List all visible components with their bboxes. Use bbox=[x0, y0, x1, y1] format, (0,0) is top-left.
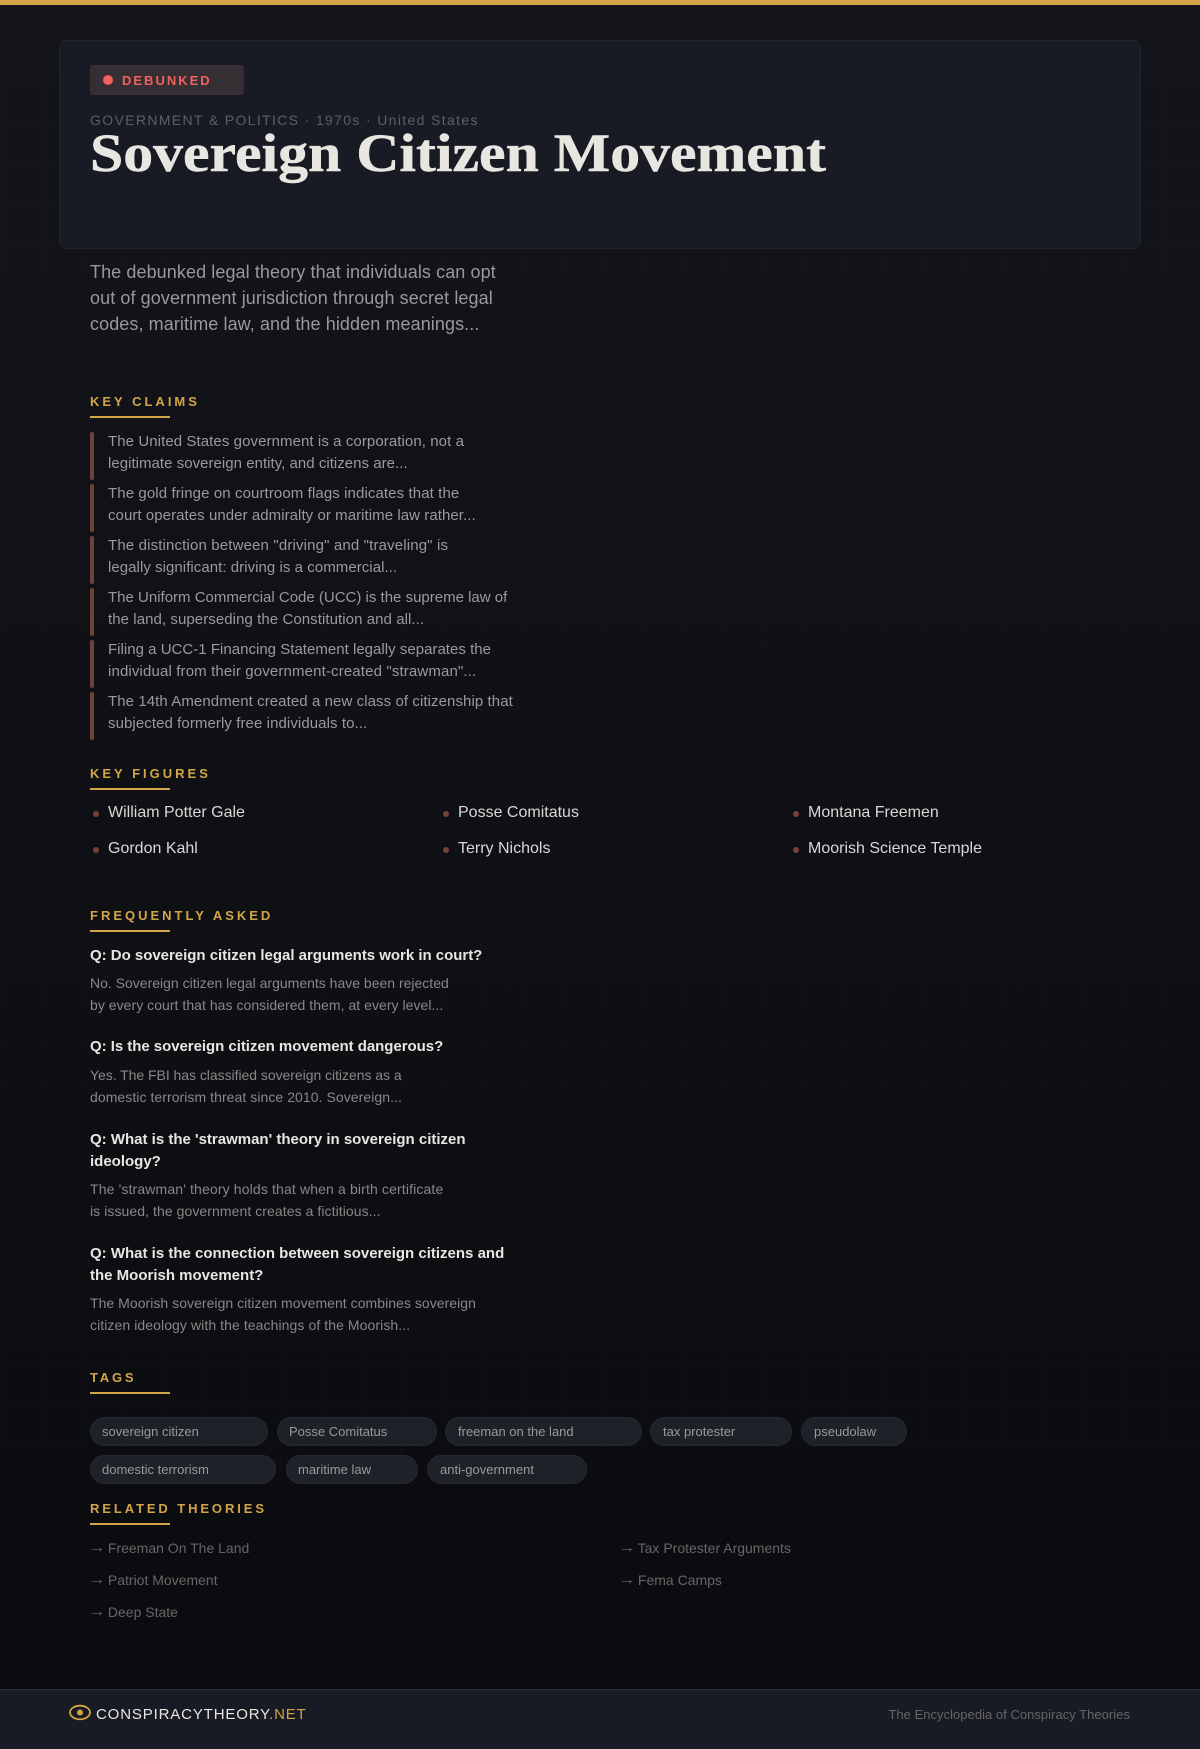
question 1: Q: Do sovereign citizen legal arguments work in court? bbox=[90, 947, 482, 964]
answer 1 bbox=[90, 975, 449, 1013]
question 4 bbox=[90, 1245, 504, 1284]
icon: eye logo bbox=[69, 1704, 91, 1720]
tag: freeman on the land: freeman on the land bbox=[458, 1424, 574, 1439]
answer 1: by every court that has considered them, at every level... bbox=[90, 997, 443, 1013]
claim 6: The 14th Amendment created a new class of citizenship that bbox=[108, 693, 513, 710]
badge label: DEBUNKED bbox=[122, 73, 212, 88]
tag: sovereign citizen: sovereign citizen bbox=[102, 1424, 199, 1439]
tag: tax protester bbox=[650, 1417, 792, 1446]
panel: key claims bbox=[90, 394, 513, 740]
figure: Montana Freemen: Montana Freemen bbox=[808, 804, 939, 821]
tag: anti-government: anti-government bbox=[440, 1462, 534, 1477]
heading: key claims: KEY CLAIMS bbox=[90, 394, 200, 409]
answer 3: is issued, the government creates a fictitious... bbox=[90, 1203, 381, 1219]
question 2: Q: Is the sovereign citizen movement dangerous? bbox=[90, 1038, 443, 1055]
link: Tax Protester Arguments: → bbox=[618, 1539, 636, 1555]
link: Patriot Movement: Patriot Movement bbox=[108, 1572, 218, 1588]
panel: tags bbox=[90, 1370, 907, 1484]
tag: Posse Comitatus: Posse Comitatus bbox=[289, 1424, 387, 1439]
description: out of government jurisdiction through secret legal bbox=[90, 288, 493, 308]
tag: pseudolaw bbox=[801, 1417, 907, 1446]
claim 5: Filing a UCC-1 Financing Statement legally separates the bbox=[108, 641, 491, 658]
question 4: Q: What is the connection between sovereign citizens and bbox=[90, 1245, 504, 1262]
claim 5: individual from their government-created "strawman"... bbox=[108, 663, 476, 680]
claim 3: The distinction between "driving" and "traveling" is bbox=[108, 537, 448, 554]
icon: status dot bbox=[103, 75, 113, 85]
claim 3 bbox=[90, 536, 448, 584]
description: The debunked legal theory that individuals can opt bbox=[90, 262, 496, 282]
description: codes, maritime law, and the hidden meanings... bbox=[90, 314, 479, 334]
figure: Posse Comitatus: Posse Comitatus bbox=[458, 804, 579, 821]
claim 1: The United States government is a corporation, not a bbox=[108, 433, 464, 450]
link: Freeman On The Land: → bbox=[88, 1539, 106, 1555]
status badge: debunked bbox=[90, 65, 244, 95]
link: Tax Protester Arguments: Tax Protester Arguments bbox=[638, 1540, 791, 1556]
brand wordmark: CONSPIRACYTHEORY.NET bbox=[96, 1706, 307, 1723]
claim 4: The Uniform Commercial Code (UCC) is the supreme law of bbox=[108, 589, 507, 606]
claim 4 bbox=[90, 588, 508, 636]
tag: sovereign citizen bbox=[90, 1417, 268, 1446]
claim 3: legally significant: driving is a commercial... bbox=[108, 559, 397, 576]
link: Deep State: → bbox=[88, 1603, 106, 1619]
claim 4: the land, superseding the Constitution and all... bbox=[108, 611, 424, 628]
question 3 bbox=[90, 1131, 466, 1170]
tag: domestic terrorism bbox=[90, 1455, 276, 1484]
claim 1: legitimate sovereign entity, and citizens are... bbox=[108, 455, 408, 472]
top accent bar bbox=[0, 0, 1200, 5]
tag: anti-government bbox=[427, 1455, 587, 1484]
category meta line: GOVERNMENT & POLITICS · 1970s · United States bbox=[90, 112, 479, 128]
tag: freeman on the land bbox=[445, 1417, 642, 1446]
answer 2: domestic terrorism threat since 2010. Sovereign... bbox=[90, 1089, 402, 1105]
answer 2 bbox=[90, 1067, 402, 1105]
panel: related theories bbox=[88, 1501, 791, 1620]
link: Freeman On The Land: Freeman On The Land bbox=[108, 1540, 249, 1556]
footer tagline: The Encyclopedia of Conspiracy Theories bbox=[888, 1707, 1130, 1722]
question 3: ideology? bbox=[90, 1153, 161, 1170]
heading: frequently asked: FREQUENTLY ASKED bbox=[90, 908, 273, 923]
claim 6: subjected formerly free individuals to... bbox=[108, 715, 367, 732]
answer 4 bbox=[90, 1295, 476, 1333]
claim 2: The gold fringe on courtroom flags indicates that the bbox=[108, 485, 459, 502]
answer 2: Yes. The FBI has classified sovereign citizens as a bbox=[90, 1067, 402, 1083]
figure: William Potter Gale: William Potter Gale bbox=[108, 804, 245, 821]
tag: domestic terrorism: domestic terrorism bbox=[102, 1462, 209, 1477]
answer 3: The 'strawman' theory holds that when a birth certificate bbox=[90, 1181, 443, 1197]
claim 2 bbox=[90, 484, 476, 532]
tag: Posse Comitatus bbox=[277, 1417, 437, 1446]
panel: frequently asked bbox=[90, 908, 504, 1333]
answer 3 bbox=[90, 1181, 443, 1219]
figure: Terry Nichols: Terry Nichols bbox=[458, 840, 550, 857]
tag: maritime law bbox=[286, 1455, 418, 1484]
figure: Gordon Kahl: Gordon Kahl bbox=[108, 840, 198, 857]
figure: Moorish Science Temple: Moorish Science Temple bbox=[808, 840, 982, 857]
question 4: the Moorish movement? bbox=[90, 1267, 263, 1284]
tag: maritime law: maritime law bbox=[298, 1462, 371, 1477]
claim 6 bbox=[90, 692, 513, 740]
answer 4: The Moorish sovereign citizen movement combines sovereign bbox=[90, 1295, 476, 1311]
answer 4: citizen ideology with the teachings of the Moorish... bbox=[90, 1317, 410, 1333]
title: Sovereign Citizen Movement bbox=[90, 123, 826, 183]
panel: header card bbox=[59, 40, 1141, 249]
question 3: Q: What is the 'strawman' theory in sovereign citizen bbox=[90, 1131, 466, 1148]
footer bbox=[0, 1689, 1200, 1749]
link: Deep State: Deep State bbox=[108, 1604, 178, 1620]
claim 1 bbox=[90, 432, 464, 480]
claim 2: court operates under admiralty or maritime law rather... bbox=[108, 507, 476, 524]
tag: pseudolaw: pseudolaw bbox=[814, 1424, 876, 1439]
heading: tags: TAGS bbox=[90, 1370, 136, 1385]
description bbox=[90, 262, 496, 334]
tag: tax protester: tax protester bbox=[663, 1424, 735, 1439]
link: Fema Camps: Fema Camps bbox=[638, 1572, 722, 1588]
heading: key figures: KEY FIGURES bbox=[90, 766, 211, 781]
link: Fema Camps: → bbox=[618, 1571, 636, 1587]
heading: related theories: RELATED THEORIES bbox=[90, 1501, 267, 1516]
claim 5 bbox=[90, 640, 491, 688]
link: Patriot Movement: → bbox=[88, 1571, 106, 1587]
panel: key figures bbox=[90, 766, 982, 857]
answer 1: No. Sovereign citizen legal arguments have been rejected bbox=[90, 975, 449, 991]
